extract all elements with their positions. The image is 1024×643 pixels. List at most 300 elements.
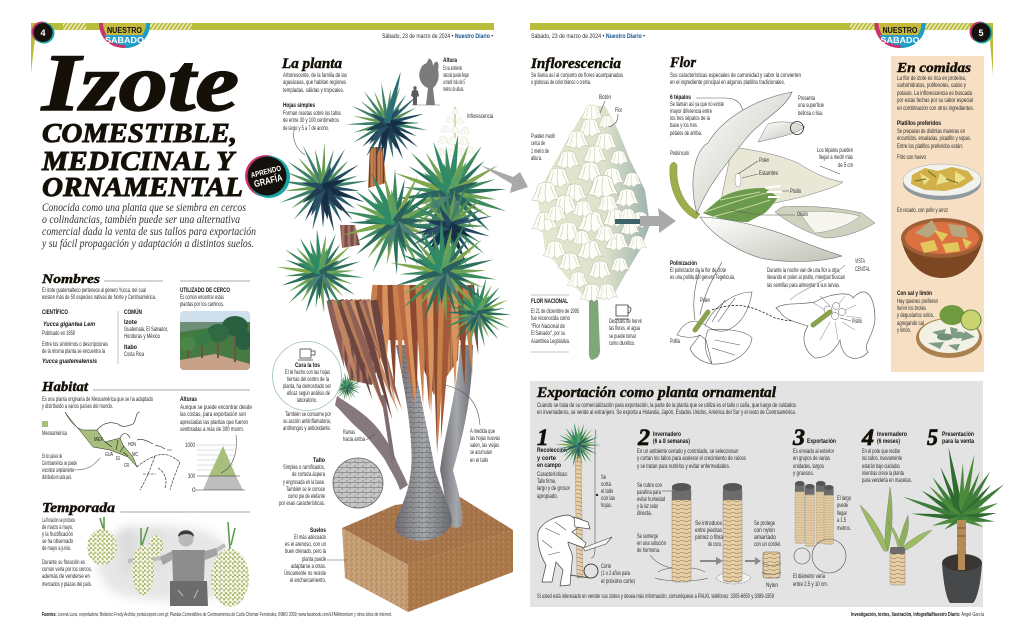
flower part labels: Los tépalos pueden — [817, 147, 853, 154]
text: suelos: Únicamente no resiste — [284, 568, 326, 577]
text: parafina: evitar humedad — [637, 496, 665, 503]
step 1: recolección: Tallo firme, — [537, 478, 556, 485]
column: nombre científico: Yucca gigantea Lem — [43, 321, 95, 328]
flower part labels: una superficie — [798, 102, 824, 109]
text: diurético: como diurético. — [609, 340, 635, 347]
step 1: recolección: y corte — [537, 455, 556, 462]
heading: En comidas: En comidas — [896, 60, 971, 75]
text: parafina: y la luz solar — [637, 503, 658, 510]
step 3: exportación: en grupos de varias — [793, 455, 830, 462]
text: polinización: es una polilla del género Tegeticula. — [670, 274, 735, 281]
text: con sal y limón: agregando sal — [897, 320, 924, 327]
intro text: En comidas — [897, 75, 974, 112]
step 2: invernadero: y se tratan para nutrirlos y evitar enfermedades. — [637, 463, 730, 470]
badge: Nuestro Sábado, left page: NUESTRO — [107, 26, 142, 35]
text: 6 tépalos: base y los tres — [670, 122, 697, 129]
icon: cup — [298, 349, 315, 360]
bracket: se corta el tallo: el tallo — [601, 488, 613, 495]
column: nombre común: Guatemala, El Salvador, — [124, 326, 168, 333]
soil block — [342, 497, 513, 612]
illustration: moth on flower, side view: Polen — [700, 297, 710, 304]
text: largo: El largo — [837, 495, 851, 502]
text: utilizado de cerco — [180, 287, 230, 308]
panel: La planta — [272, 56, 528, 612]
flower part labels: Estambre — [759, 170, 778, 177]
illustration: sprouting stem — [860, 487, 932, 585]
text: alturas: sembradas a más de 300 msnm. — [180, 426, 244, 433]
legend: Mesoamérica: Mesoamérica — [42, 430, 67, 437]
text: tallo: También se le conoce — [286, 486, 325, 493]
step 2: invernadero — [637, 425, 781, 589]
column: nombre científico: de la misma planta se encuentra la — [42, 348, 105, 355]
illustration: moth on flower, top view: Pistilo — [852, 318, 862, 325]
trunks — [335, 345, 473, 541]
illustration: stem in pumice stones — [716, 483, 751, 584]
intro text: Nombres — [42, 287, 156, 301]
callout: Cura la tos — [272, 342, 342, 410]
text: noche: las semillas para alimentar a sus larvas. — [767, 282, 840, 289]
text: nylon — [754, 520, 781, 548]
text: piedras pómez: Se introduce — [695, 520, 722, 527]
flower part labels: Presenta — [798, 95, 815, 102]
yucca flower spike — [436, 107, 475, 165]
text: 6 tépalos: los tres sépalos de la — [670, 115, 710, 122]
text: altura: En su ambiente — [443, 65, 462, 72]
text: floración — [42, 517, 92, 588]
text: antiinflamatoria — [283, 411, 332, 432]
text: height of cluster: 1 metro de — [531, 148, 549, 155]
step 3: exportación: Es enviado al exterior — [793, 448, 835, 455]
map: Mesoamerica: CR — [124, 463, 129, 469]
illustration: izote stem with crown — [555, 422, 601, 578]
intro text: Habitat: Es una planta originaria de Mesoamérica que se ha adaptado — [42, 396, 153, 403]
text: suelos: es el arenoso, con un — [285, 541, 326, 548]
illustration: farmer cutting the stem — [538, 515, 635, 586]
aprendo grafía badge — [245, 155, 290, 198]
illustration: wrapped stem: Nylon — [766, 582, 778, 589]
gray arrow: inflorescence to flower — [615, 208, 676, 233]
text: hojas simples: de entre 30 y 100 centímetros — [283, 117, 339, 124]
text: parafina — [637, 482, 672, 517]
column: nombre científico — [42, 307, 108, 365]
column: nombre común: Izote — [124, 319, 137, 326]
aprendo grafía badge: APRENDO — [250, 163, 282, 180]
step 3: exportación: y gruesos. — [793, 470, 814, 477]
intro text: En comidas: por estas fechas por su sabor especial — [897, 97, 973, 104]
text: antiinflamatoria: También se consume por — [285, 411, 332, 418]
box: flor nacional: FLOR NACIONAL — [531, 298, 568, 305]
text: parafina: parafina para — [637, 489, 661, 496]
panel: Nombres — [41, 271, 253, 370]
step 3: exportación: unidades, largos — [793, 463, 824, 470]
text: floración: y la fructificación — [42, 531, 73, 538]
chart: altitude pyramid — [185, 435, 245, 494]
text: floración: de marzo a mayo, — [42, 524, 73, 531]
credits line: Investigación, textos, ilustración, infografía/Nuestro Diario: Ángel García — [851, 611, 985, 618]
step 2: invernadero: y cortan los tallos para acelerar el crecimiento de raíces — [637, 455, 746, 462]
step 2: invernadero: 2 — [637, 425, 650, 450]
photo: izotes on a fence line — [180, 311, 253, 370]
text: diurético: Después de hervir — [609, 318, 643, 325]
step 4: invernadero: (6 meses) — [877, 438, 900, 445]
intro text: Flor — [670, 72, 801, 86]
text: alturas: Alturas — [180, 396, 197, 403]
box: flor nacional: “Flor Nacional de — [531, 323, 565, 330]
intro text: Nombres: El izote guatemalteco pertenece al género Yucca, del cual — [42, 287, 146, 294]
text: suelos: buen drenado, pero la — [285, 548, 326, 555]
illustration: farmer cutting the stem: Corte — [601, 563, 611, 570]
text: con sal y limón: Con sal y limón — [897, 290, 932, 297]
intro text: Exportación: Cuando se trata de su comercialización para exportación, la parte de la planta que se utiliza es el tallo o caña, que luego de cuidados — [537, 402, 797, 409]
illustration: farmer cutting the stem: (1 o 2 años para — [601, 570, 630, 577]
panel: Habitat — [41, 379, 252, 494]
text: diámetro: entre 2.5 y 10 cm. — [793, 581, 828, 588]
label: ramas hacia arriba: hacia arriba — [343, 436, 365, 443]
illustration: izote plant — [272, 71, 525, 612]
text: con sal y limón: hervir los brotes — [897, 305, 926, 312]
chart: altitude pyramid: 1000 — [185, 442, 195, 449]
step 5: presentación — [902, 425, 1006, 603]
flower part labels — [730, 95, 853, 218]
text: Cura la tos: El té hecho con las hojas — [285, 369, 330, 376]
label: hojas viejas: se acumulan — [470, 449, 492, 456]
text: floración: se ha observado — [42, 538, 73, 545]
step 5: presentación: Presentación — [942, 431, 974, 438]
text: hormona: de hormona. — [637, 547, 660, 554]
flower part labels: bellosa o lisa. — [798, 110, 823, 117]
heading: Nombres: Nombres — [41, 271, 100, 286]
map: Mesoamerica: GUA — [105, 452, 113, 458]
text: Cura la tos: Cura la tos — [295, 362, 320, 369]
arrow to wrapped stem — [745, 557, 761, 565]
page number 4 — [32, 22, 54, 44]
panel: La planta: natural puede llegar — [443, 72, 469, 79]
intro text: En comidas: potasio. La inflorescencia es buscada — [897, 90, 972, 97]
step 1: recolección: 1 — [537, 425, 548, 450]
flower part labels: llegar a medir más — [819, 154, 853, 161]
intro text: La planta — [283, 72, 347, 94]
text: piedras pómez — [695, 520, 723, 548]
illustration: fried flowers with egg — [903, 164, 981, 200]
label: vista cenital: CENITAL — [855, 266, 870, 273]
map note: distribuida en cada país. — [42, 474, 72, 481]
icon: height silhouette — [411, 59, 440, 105]
text: diámetro: El diámetro varía — [793, 573, 825, 580]
step 4: invernadero: los tallos, nuevamente — [862, 455, 902, 462]
text: 6 tépalos — [670, 94, 743, 137]
text: hormona: Se sumerge — [637, 533, 658, 540]
text: tallo: de corteza áspera — [292, 471, 325, 478]
panel: Exportación como planta ornamental — [530, 381, 1006, 607]
text: parafina: Se cubre con — [637, 482, 662, 489]
step 5: presentación: para la venta — [942, 438, 974, 445]
text: hormona: en una solución — [637, 540, 666, 547]
leaf rosettes — [272, 71, 525, 401]
text: suelos: adaptarse a otras. — [291, 563, 326, 570]
step 4: invernadero: mientras crece la planta — [862, 470, 904, 477]
text: noche: llevando el polen al pistilo, mientras buscan — [767, 274, 845, 281]
flower part labels: Polen — [759, 157, 769, 164]
text: suelos: El más adecuado — [294, 534, 326, 541]
illustration: bowl of stew — [901, 218, 983, 278]
text: tallo: Tallo — [313, 457, 325, 464]
panel: Flor — [669, 55, 875, 364]
text: altura — [443, 57, 469, 93]
column: nombre común — [124, 307, 168, 358]
text: largo — [837, 495, 851, 532]
heading: Temporada: Temporada — [42, 500, 115, 515]
illustration: moth on flower, side view — [670, 262, 752, 364]
text: diurético: se puede tomar — [609, 333, 636, 340]
text: hojas simples: de largo y 5 a 7 de ancho. — [283, 125, 329, 132]
dashed moth path — [712, 305, 815, 321]
map: Mesoamerica: HON — [128, 442, 136, 448]
map: Mesoamerica: ES — [116, 456, 120, 462]
column: nombre común: Honduras y México — [124, 333, 160, 340]
panel: Inflorescencia — [530, 56, 651, 360]
step 4: invernadero: para venderla en macetas. — [862, 477, 912, 484]
chart: altitude pyramid: 0 — [192, 487, 196, 494]
label: inflorescencia: Inflorescencia — [467, 113, 493, 120]
text: nylon: con nylon — [754, 527, 775, 534]
subtitle: comercial dada la venta de sus tallos para exportación — [42, 226, 256, 238]
title: ORNAMENTAL — [42, 172, 243, 202]
badge: Nuestro Sábado, right page: SABADO — [880, 35, 920, 45]
step 2: invernadero: (6 a 8 semanas) — [653, 438, 690, 445]
badge: Nuestro Sábado, right page: NUESTRO — [882, 26, 918, 35]
text: platillos preferidos: Platillos preferidos — [897, 120, 941, 127]
text: Cura la tos: planta, ha demostrado ser — [283, 383, 332, 390]
text: tallo: y engrosada en la base. — [283, 479, 325, 486]
column: nombre científico: Publicado en 1859 — [42, 330, 75, 337]
text: nylon: con un cordel. — [754, 541, 781, 548]
legend: Mesoamérica — [42, 421, 67, 437]
intro text: Nombres: existen más de 50 especies nativas de Norte y Centroamérica. — [42, 294, 156, 301]
heading: Habitat: Habitat — [41, 379, 89, 394]
text: suelos — [284, 527, 347, 584]
text: suelos: Suelos — [310, 527, 326, 534]
icon: cup — [615, 305, 631, 319]
map note — [42, 453, 100, 481]
step 4: invernadero: 4 — [861, 425, 874, 450]
intro text: Inflorescencia: Se llama así al conjunto de flores acampanadas — [531, 72, 623, 79]
column: nombre científico: Yucca guatemalensis — [42, 358, 97, 365]
text: platillos preferidos — [897, 120, 971, 161]
text: largo: metros. — [837, 525, 851, 532]
text: 6 tépalos: pétalos de arriba. — [670, 130, 702, 137]
text: 6 tépalos: mayor diferencia entre — [670, 108, 712, 115]
column: nombre común: COMÚN — [124, 307, 142, 316]
text: platillos preferidos: Se preparan de distintas maneras en — [897, 128, 965, 135]
step 4: invernadero: Invernadero — [877, 431, 907, 438]
illustration: stem with paraffin and hormone — [655, 483, 708, 582]
step 3: exportación: Exportación — [807, 438, 836, 445]
illustration: flower cluster — [532, 105, 651, 360]
bracket: se corta el tallo: Se — [601, 474, 606, 481]
top bar: right page — [530, 23, 993, 75]
intro text: Inflorescencia — [531, 72, 623, 86]
step 1: recolección — [537, 422, 635, 586]
column: nombre común: Itabo — [124, 344, 137, 351]
text: altura: Altura — [443, 57, 457, 64]
subtitle: o colindancias, también puede ser una alternativa — [42, 214, 240, 226]
text: piedras pómez: pómez o fibra — [695, 534, 723, 541]
subtitle: Conocida como una planta que se siembra en cercos — [42, 202, 246, 214]
text: 6 tépalos: Se llaman así ya que no existe — [670, 101, 724, 108]
text: alturas: las costas, para exportación son — [180, 411, 246, 418]
title — [41, 37, 243, 202]
column: nombre común: Costa Rica — [124, 351, 144, 358]
labels: botón and flor — [599, 94, 623, 127]
map note: En los países de — [42, 453, 62, 460]
text: diurético: las flores, el agua — [609, 325, 640, 332]
bracket: se corta el tallo: hojas. — [601, 502, 612, 509]
step 4: invernadero — [860, 425, 932, 585]
text: polinización: El polinizador de la flor de izote — [670, 267, 726, 274]
illustration: potted izote — [902, 447, 1006, 603]
intro text: En comidas: en combinación con otros ingredientes. — [897, 105, 974, 112]
labels: botón and flor: Flor — [615, 107, 623, 114]
gray arrow: plant to inflorescence — [480, 165, 528, 193]
step 4: invernadero: En el pote que recibe — [862, 448, 900, 455]
step 4: invernadero: estarán bajo cuidados — [862, 463, 900, 470]
text: con sal y limón: Hay quienes prefieren — [897, 298, 938, 305]
map: Mesoamerica: MEX — [94, 437, 104, 443]
illustration: wrapped stem — [762, 552, 781, 589]
text: largo: puede — [837, 502, 848, 509]
intro text: Habitat — [42, 396, 153, 410]
text: platillos preferidos: encurtidos, ensaladas, picadillo y sopas. — [897, 135, 971, 142]
heading: Flor: Flor — [669, 55, 696, 71]
text: altura: metros de altura. — [443, 86, 464, 93]
text: altura: a medir más de 5 — [443, 79, 465, 86]
label: vista cenital — [855, 258, 870, 273]
chart: altitude pyramid: 300 — [188, 473, 195, 480]
text: height of cluster — [531, 133, 555, 162]
text: diurético — [609, 318, 643, 347]
sources line: Fuentes: Lorena Luna, exportadora; Botánico Fredy Archila; portal.export.com.gt; Plantas Comestibles de Centroamérica de Carla Chizmar Fernández, INBIO 2009; www.facebook.com/LFMArboretum y otros sitios de internet. — [42, 612, 392, 618]
text: nylon: Se protege — [754, 520, 775, 527]
text: nylon: amarrado — [754, 534, 776, 541]
box: flor nacional: fue reconocida como — [531, 315, 570, 322]
bracket: se corta el tallo: con las — [601, 495, 615, 502]
text: noche: Durante la noche van de una flor a otra, — [767, 267, 840, 274]
diameter circles — [794, 539, 846, 573]
box: flor nacional: Asamblea Legislativa. — [531, 338, 570, 345]
step 2: invernadero: Invernadero — [653, 431, 681, 438]
illustration: woman holding flower clusters — [87, 517, 249, 607]
dry hanging leaves — [326, 147, 481, 455]
contact line: Si usted está interesado en vender sus izotes y desea más información, comuníquese a PALKI, teléfonos: 3305-6650 y 3089-1959 — [537, 593, 774, 600]
intro text: La planta: Arborescente, de la familia de las — [283, 72, 347, 79]
title: COMESTIBLE, — [42, 118, 237, 148]
intro text: Exportación: en invernaderos, se vende al extranjero. Se exporta a Holanda, Japón, Estados Unidos, América del Sur y el resto de Centroamérica. — [537, 409, 796, 416]
top bar: left page — [31, 23, 494, 73]
label: pedúnculo: Pedúnculo — [670, 150, 689, 157]
heading: Exportación: Exportación como planta ornamental — [536, 385, 776, 401]
illustration: lime and buds plate — [916, 305, 982, 358]
intro text: La planta: agaváceas, que habitan regiones — [283, 79, 346, 86]
text: tallo: por esas características. — [279, 500, 325, 507]
text: floración: mercados y plazas del país. — [42, 581, 92, 588]
bracket: se corta el tallo: corta — [601, 481, 611, 488]
step 3: exportación: 3 — [792, 425, 805, 450]
text: tallo: Simples o ramificados, — [283, 464, 325, 471]
text: floración: de mayo a junio. — [42, 545, 71, 552]
map note: Centroamérica se puede — [42, 460, 77, 467]
label: en recado: En recado, con pollo y arroz — [897, 207, 948, 214]
text: hojas simples: Forman rosetas sobre los tallos — [283, 110, 341, 117]
box: flor nacional — [531, 295, 579, 352]
step 1: recolección: Recolección — [537, 447, 567, 454]
text: polinización: Polinización — [670, 260, 697, 267]
heading: La planta: La planta — [281, 56, 342, 72]
text: suelos: el encharcamiento. — [290, 577, 326, 584]
label: hojas viejas: salen, las viejas — [470, 442, 499, 449]
map: Mesoamerica — [65, 412, 180, 490]
text: utilizado de cerco: UTILIZADO DE CERCO — [180, 287, 230, 294]
date line, right page: Sábado, 23 de marzo de 2024 • Nuestro Diario • — [531, 33, 646, 40]
illustration: open flower — [670, 92, 875, 262]
text: Cura la tos — [283, 362, 332, 404]
intro text: Exportación — [537, 402, 797, 416]
flower part labels: de 5 cm — [838, 162, 853, 169]
date line, left page: Sábado, 23 de marzo de 2024 • Nuestro Diario • — [382, 33, 494, 40]
text: height of cluster: cerca de — [531, 140, 545, 147]
intro text: Flor: Sus características especiales de carnosidad y sabor la convierten — [670, 72, 801, 79]
text: largo: a 1.5 — [837, 517, 846, 524]
text: Cura la tos: eficaz según análisis de — [287, 390, 330, 397]
subtitle: y su fácil propagación y adaptación a distintos suelos. — [41, 238, 254, 250]
column: nombre científico: CIENTÍFICO — [42, 307, 68, 316]
text: hormona — [637, 533, 675, 568]
text: Cura la tos: tiernas del centro de la — [287, 376, 329, 383]
text: hojas simples — [283, 102, 341, 155]
step 1: recolección: apropiado. — [537, 493, 558, 500]
step 5: presentación: 5 — [927, 425, 938, 450]
intro text: En comidas: carbohidratos, polifenoles, calcio y — [897, 82, 967, 89]
text: platillos preferidos: Frito con huevo — [897, 154, 926, 161]
text: noche — [767, 267, 845, 289]
intro text: Flor: en el ingrediente principal en algunos platillos tradicionales. — [670, 79, 785, 86]
text: Cura la tos: laboratorio. — [297, 397, 317, 404]
text: floración: además de venderse en — [42, 573, 90, 580]
badge: Nuestro Sábado, right page — [874, 23, 926, 48]
page number 4: 4 — [40, 28, 46, 38]
badge: Nuestro Sábado, left page: SABADO — [105, 35, 144, 45]
illustration: moth on flower, top view — [776, 265, 875, 358]
aprendo grafía badge: GRAFÍA — [253, 172, 284, 190]
arrow to second stem — [700, 557, 723, 565]
text: 6 tépalos: 6 tépalos — [670, 94, 691, 101]
step 1: recolección: en campo — [537, 462, 561, 469]
title: Izote — [41, 37, 239, 128]
intro text: Inflorescencia: o globosas de color blanco o crema. — [531, 79, 591, 86]
text: tallo: como pie de elefante — [288, 493, 325, 500]
text: antiinflamatoria: su acción antiinflamatoria, — [283, 418, 331, 425]
text: hojas simples: Hojas simples — [283, 102, 315, 109]
illustration: stem bundle — [795, 481, 834, 546]
label: hojas viejas: en el tallo — [470, 457, 488, 464]
text: alturas — [180, 396, 252, 433]
illustration: farmer cutting the stem: el próximo corte) — [601, 578, 635, 585]
flower part labels: Pistilo — [790, 188, 801, 195]
illustration: moth on flower, side view: Polilla — [670, 338, 680, 345]
bracket: se corta el tallo — [591, 430, 615, 558]
step 2: invernadero: En un ambiente cerrado y controlado, se seleccionan — [637, 448, 738, 455]
text: alturas: Aunque se puede encontrar desde — [180, 404, 252, 411]
panel: Temporada — [42, 500, 250, 607]
